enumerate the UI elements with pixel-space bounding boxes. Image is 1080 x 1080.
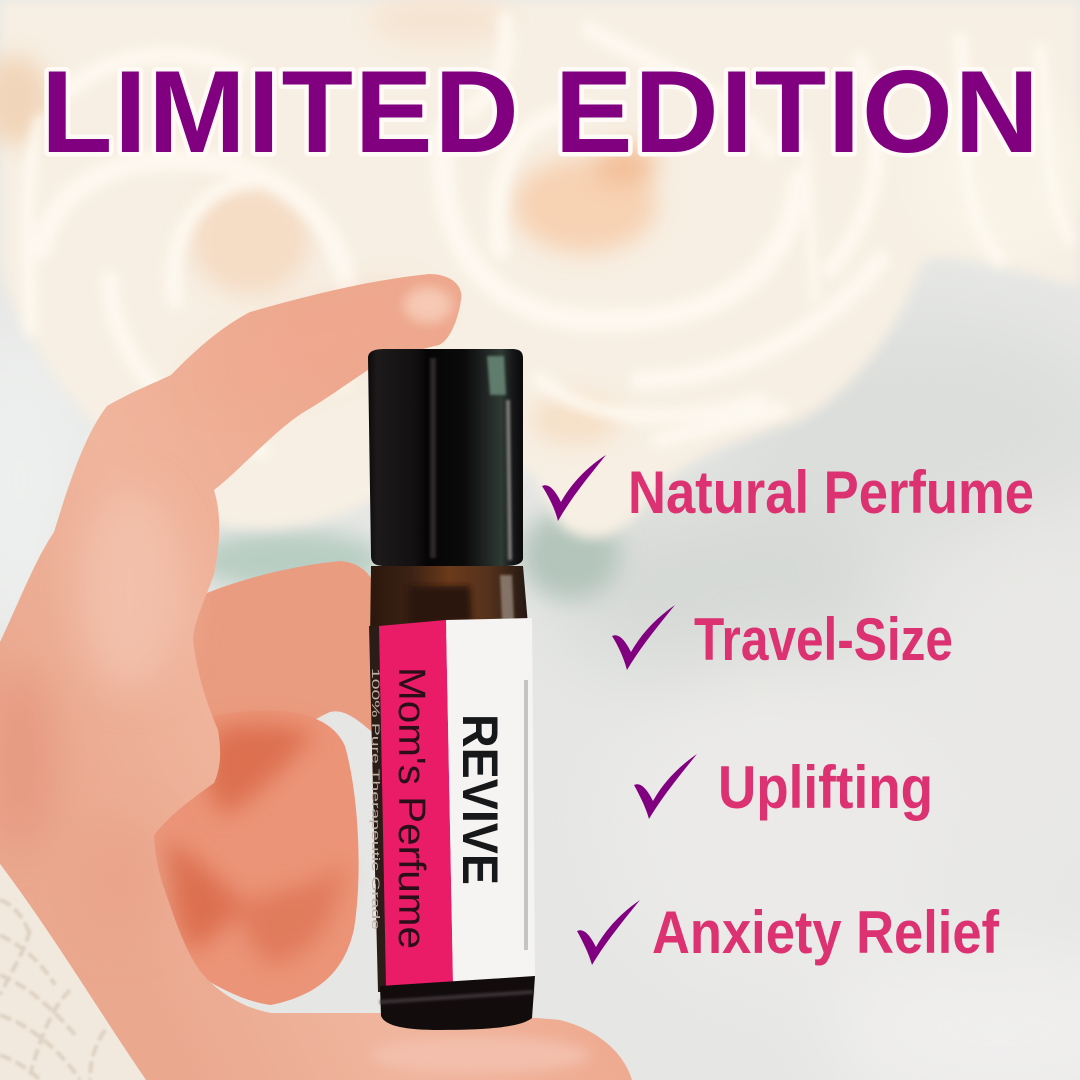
benefit: Anxiety Relief: Anxiety Relief: [652, 899, 1000, 966]
curled ring finger: [154, 719, 359, 1005]
icon: check mark: [542, 455, 606, 521]
benefit: Uplifting: [634, 754, 933, 821]
benefit: Uplifting: Uplifting: [718, 754, 933, 821]
rose blossoms: [0, 0, 1080, 538]
hand holding the bottle: [0, 274, 632, 1080]
highlights on hand: [0, 282, 374, 905]
rose peach centres: [0, 0, 668, 450]
benefit: Natural Perfume: Natural Perfume: [628, 459, 1034, 526]
icon: check mark: [577, 900, 640, 965]
benefit: Travel-Size: [612, 605, 953, 673]
black cap: [368, 349, 523, 566]
pink label panel: [379, 620, 453, 986]
fingertip highlight: [404, 287, 452, 323]
benefit: Travel-Size: Travel-Size: [694, 606, 953, 673]
icon: check mark: [634, 754, 697, 819]
curled finger shadows: [159, 725, 345, 965]
roller bottle: [368, 349, 535, 1030]
label text: Mom's Perfume: Mom's Perfume: [390, 667, 432, 949]
dark glass stripe beside label: [369, 625, 388, 992]
fine print on label: [524, 680, 528, 950]
title: LIMITED EDITION: [41, 46, 1039, 177]
label text: grade line: 100% Pure Therapeutic Grade: [369, 668, 381, 930]
icon: check mark: [612, 605, 675, 670]
rose petal highlights: [28, 20, 1070, 450]
amber glass: [370, 566, 528, 640]
white label panel: [446, 618, 535, 982]
palm and index finger: [0, 274, 632, 1080]
knit sleeve: [0, 864, 146, 1080]
label text: REVIVE: REVIVE: [452, 714, 508, 885]
teal shadow between rose and bottle: [195, 510, 620, 600]
thumb highlight: [370, 1037, 590, 1073]
bottle base: [380, 976, 535, 1030]
back middle finger: [193, 561, 372, 732]
